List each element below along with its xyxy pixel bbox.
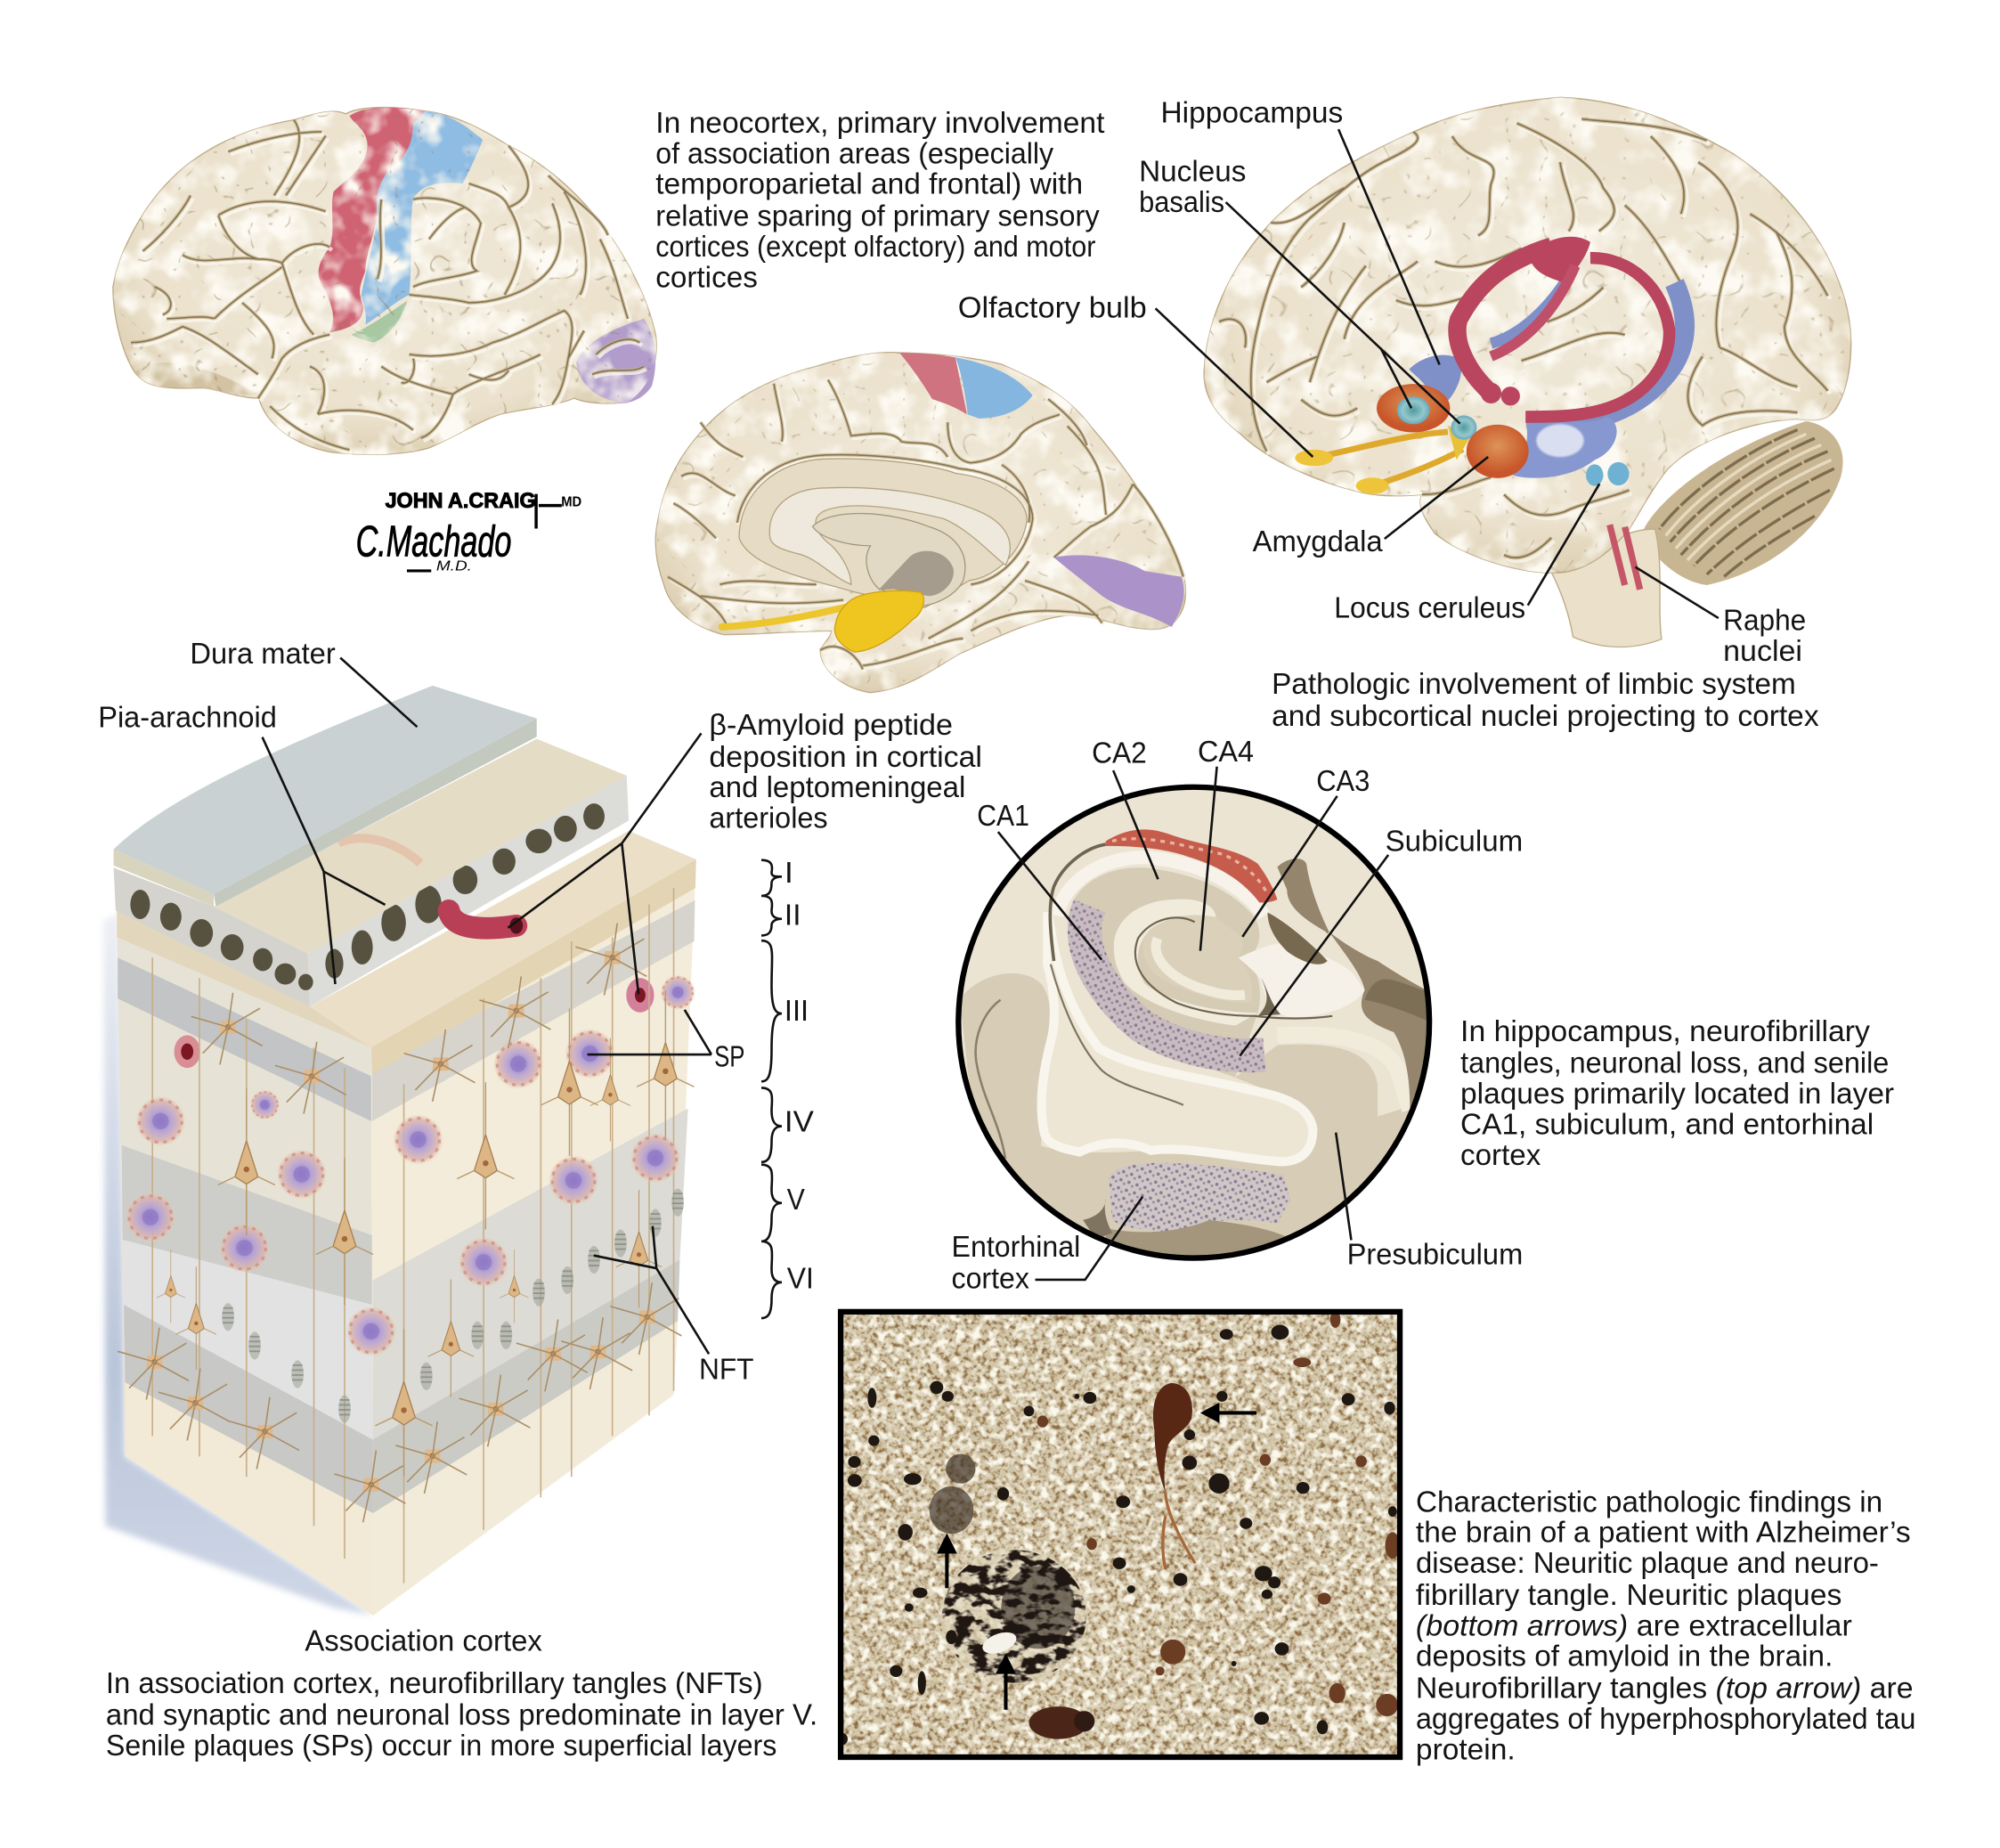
hippocampus labels and leader lines bbox=[952, 735, 1523, 1295]
stellate neurons bbox=[118, 924, 681, 1522]
text: neocortex involvement: In neocortex, primary involvement bbox=[655, 106, 1104, 139]
region: sensory cortex bbox=[955, 357, 1033, 419]
text: hippocampus caption: In hippocampus, neurofibrillary bbox=[1460, 1014, 1870, 1047]
hippocampus labels and leader lines: CA2 bbox=[1092, 737, 1147, 769]
arteriole bbox=[449, 910, 516, 928]
thalamic area bbox=[812, 514, 965, 606]
hippocampus cross-section circle bbox=[958, 787, 1436, 1268]
large dark neuron bbox=[1029, 1706, 1094, 1739]
hippocampus in blue bbox=[1409, 283, 1685, 478]
text: pathologic findings caption: deposits of amyloid in the brain. bbox=[1416, 1640, 1833, 1673]
sulci bbox=[1219, 119, 1830, 561]
pia-arachnoid right edge with cells bbox=[308, 776, 629, 1006]
text: neocortex involvement: of association areas (especially bbox=[655, 136, 1054, 169]
cortex labels and leader lines: deposition in cortical bbox=[709, 740, 982, 773]
thin sulcal line bbox=[1051, 965, 1183, 1105]
limbic labels and leader lines: nuclei bbox=[1723, 634, 1802, 667]
text: hippocampus caption: plaques primarily located in layer bbox=[1460, 1077, 1894, 1110]
limbic labels and leader lines: Raphe bbox=[1723, 604, 1806, 637]
cingulate gyrus bbox=[739, 459, 1027, 607]
hippocampus labels and leader lines: Presubiculum bbox=[1347, 1237, 1523, 1270]
text: association cortex caption: and synaptic and neuronal loss predominate in layer V. bbox=[106, 1698, 817, 1731]
region: visual cortex bbox=[576, 319, 655, 403]
text: hippocampus caption: CA1, subiculum, and entorhinal bbox=[1460, 1107, 1874, 1140]
block top surface bbox=[310, 831, 696, 1047]
parahippocampal gray matter bbox=[962, 973, 1409, 1238]
text: pathologic findings caption: the brain of a patient with Alzheimer’s bbox=[1416, 1516, 1911, 1549]
limbic labels and leader lines: Locus ceruleus bbox=[1334, 590, 1525, 623]
text: association cortex caption: In association cortex, neurofibrillary tangles (NFTs) bbox=[106, 1666, 763, 1699]
cortical layer braces and numerals: II bbox=[785, 898, 801, 931]
right face of cortex bbox=[371, 859, 696, 1616]
medial brain view bbox=[655, 353, 1186, 693]
text: neocortex involvement bbox=[655, 106, 1104, 293]
limbic labels and leader lines: Olfactory bulb bbox=[958, 291, 1147, 324]
inner dark line bbox=[1135, 917, 1332, 1019]
hippocampus labels and leader lines: Entorhinal bbox=[952, 1230, 1080, 1263]
cortex labels and leader lines: SP bbox=[714, 1039, 745, 1072]
region: visual cortex bbox=[1054, 555, 1184, 627]
cortical layer braces and numerals: VI bbox=[787, 1262, 814, 1295]
signature: illustrators: M.D. bbox=[436, 558, 472, 574]
sulci bbox=[131, 120, 646, 452]
text: neocortex involvement: temporoparietal and frontal) with bbox=[655, 167, 1083, 200]
pia-arachnoid left edge with cells bbox=[114, 867, 313, 1006]
cortical layer braces and numerals: V bbox=[787, 1183, 805, 1216]
cortical layer braces and numerals: IV bbox=[785, 1105, 814, 1138]
region: motor cortex bbox=[899, 353, 967, 414]
dura mater plate bbox=[114, 686, 537, 907]
cortical layer braces and numerals: I bbox=[785, 856, 793, 889]
stained nuclei bbox=[837, 1325, 1397, 1745]
region: auditory cortex bbox=[352, 301, 407, 343]
cortex labels and leader lines: β-Amyloid peptide bbox=[709, 708, 953, 741]
olfactory bulb and tracts bbox=[1295, 426, 1469, 494]
histology micrograph bbox=[837, 1311, 1400, 1757]
text: pathologic findings caption: (bottom arrows) are extracellular bbox=[1416, 1608, 1852, 1641]
text: pathologic findings caption: aggregates of hyperphosphorylated tau bbox=[1416, 1702, 1915, 1735]
association cortex block bbox=[103, 686, 696, 1616]
sulci bbox=[668, 379, 1185, 672]
dentate ring bbox=[1114, 900, 1258, 1026]
stippled neuron loss: entorhinal bbox=[1109, 1163, 1290, 1233]
text: pathologic findings caption: Neurofibrillary tangles (top arrow) are bbox=[1416, 1672, 1914, 1705]
text: neocortex involvement: relative sparing of primary sensory bbox=[655, 199, 1100, 232]
text: pathologic findings caption: Characteristic pathologic findings in bbox=[1416, 1485, 1882, 1518]
limbic labels and leader lines: basalis bbox=[1139, 185, 1224, 218]
dark hippocampal sulcus bbox=[1050, 844, 1106, 961]
cortical layer braces and numerals: III bbox=[785, 994, 809, 1027]
cortex labels and leader lines: Dura mater bbox=[190, 637, 336, 670]
white hippocampal rim bbox=[1057, 858, 1264, 916]
arteriole cross-sections bbox=[175, 978, 654, 1068]
raphe nuclei bbox=[1610, 525, 1640, 590]
pia-arachnoid top plate bbox=[214, 739, 627, 954]
signature: illustrators: C.Machado bbox=[356, 518, 511, 566]
hippocampus labels and leader lines: Subiculum bbox=[1386, 824, 1523, 857]
bottom dark band bbox=[1106, 1220, 1286, 1256]
olfactory cortex bbox=[834, 590, 923, 652]
inner dentate field bbox=[1156, 916, 1192, 925]
stippled neuron loss: CA1 and subiculum bbox=[1085, 906, 1264, 1055]
meningeal vessel bbox=[338, 838, 420, 864]
text: pathologic findings caption: fibrillary tangle. Neuritic plaques bbox=[1416, 1578, 1841, 1611]
text: hippocampus caption: cortex bbox=[1460, 1138, 1541, 1171]
region: primary motor cortex bbox=[319, 108, 425, 332]
neuritic plaque bbox=[940, 1549, 1088, 1684]
cerebellum bbox=[1642, 421, 1843, 585]
text: neocortex involvement: cortices bbox=[655, 260, 758, 293]
cortex labels and leader lines: arterioles bbox=[709, 802, 828, 834]
olfactory tract bbox=[722, 606, 851, 627]
region: primary sensory cortex bbox=[362, 111, 483, 325]
limbic brain view bbox=[1204, 97, 1851, 647]
text: limbic caption: Pathologic involvement of limbic system bbox=[1272, 667, 1796, 700]
corpus callosum bbox=[769, 487, 1010, 584]
white right lobe bbox=[1239, 943, 1365, 1018]
neurofibrillary tangle bbox=[1153, 1383, 1195, 1569]
cortex labels and leader lines bbox=[98, 637, 982, 1385]
hippocampus labels and leader lines: CA3 bbox=[1316, 764, 1370, 797]
text: hippocampus caption: tangles, neuronal loss, and senile bbox=[1460, 1046, 1889, 1079]
brainstem bbox=[1551, 529, 1662, 647]
limbic labels and leader lines: Amygdala bbox=[1253, 525, 1383, 558]
outer band of subiculum bbox=[1277, 1035, 1410, 1110]
tan superficial strip bbox=[371, 859, 696, 1074]
neurofibrillary tangles bbox=[222, 1189, 684, 1423]
limbic labels and leader lines bbox=[958, 96, 1806, 667]
text: association cortex caption bbox=[106, 1624, 817, 1762]
text: pathologic findings caption bbox=[1416, 1485, 1915, 1765]
vertical dendrites bbox=[152, 888, 674, 1583]
text: association cortex caption: Senile plaques (SPs) occur in more superficial layers bbox=[106, 1729, 776, 1762]
locus ceruleus bbox=[1586, 462, 1630, 486]
limbic labels and leader lines: Nucleus bbox=[1139, 154, 1246, 187]
cast shadow bbox=[103, 913, 373, 1616]
dark choroid fissure bbox=[1277, 859, 1436, 1110]
left thin sulcus bbox=[976, 1000, 1005, 1159]
left face of cortex bbox=[117, 913, 373, 1616]
nucleus basalis region bbox=[1377, 384, 1476, 440]
cortex labels and leader lines: Pia-arachnoid bbox=[98, 700, 277, 733]
cortex labels and leader lines: and leptomeningeal bbox=[709, 770, 965, 803]
CA tan field bbox=[1068, 867, 1260, 1078]
hippocampus labels and leader lines: CA4 bbox=[1198, 735, 1254, 768]
small neuritic plaque bbox=[930, 1454, 975, 1534]
white matter lobe bbox=[1042, 912, 1313, 1161]
text: limbic caption: and subcortical nuclei projecting to cortex bbox=[1272, 699, 1819, 732]
amygdala bbox=[1467, 425, 1529, 478]
third ventricle bbox=[878, 551, 954, 596]
text: neocortex involvement: cortices (except olfactory) and motor bbox=[655, 230, 1095, 263]
hippocampus labels and leader lines: CA1 bbox=[977, 799, 1029, 832]
text: hippocampus caption bbox=[1460, 1014, 1894, 1171]
text: limbic caption bbox=[1272, 667, 1819, 732]
micrograph arrows bbox=[937, 1403, 1256, 1710]
cortex labels and leader lines: NFT bbox=[699, 1352, 754, 1385]
signature: illustrators: JOHN A.CRAIG bbox=[386, 489, 536, 513]
hippocampus labels and leader lines: cortex bbox=[952, 1262, 1029, 1295]
signature: illustrators bbox=[356, 489, 581, 574]
text: pathologic findings caption: disease: Neuritic plaque and neuro- bbox=[1416, 1546, 1879, 1579]
cortical layer bands bbox=[118, 900, 695, 1616]
fornix in red bbox=[1458, 237, 1670, 417]
inferior frontal shading bbox=[134, 362, 258, 395]
cortical layer braces and numerals bbox=[761, 856, 814, 1318]
senile plaques bbox=[125, 974, 695, 1356]
pyramidal neurons bbox=[157, 990, 695, 1477]
lateral brain view bbox=[113, 108, 656, 454]
signature: illustrators: MD bbox=[561, 495, 581, 510]
choroid plexus band bbox=[1106, 829, 1277, 903]
limbic labels and leader lines: Hippocampus bbox=[1160, 96, 1343, 129]
text: association cortex caption: Association cortex bbox=[305, 1624, 542, 1657]
text: pathologic findings caption: protein. bbox=[1416, 1732, 1516, 1765]
